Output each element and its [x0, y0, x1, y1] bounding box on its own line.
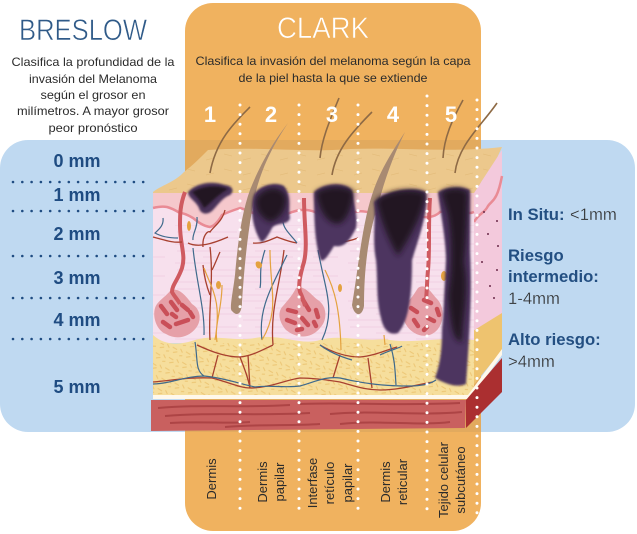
Breslow blue band [0, 140, 635, 432]
dermis front [153, 193, 474, 343]
sweat glands [154, 286, 443, 337]
risk legend [508, 205, 617, 371]
right side of skin [468, 150, 502, 335]
blood vessels blue [153, 217, 436, 387]
Breslow depth labels: 2 mm [53, 224, 101, 244]
risk legend: intermedio: [508, 267, 599, 286]
Breslow depth labels: 5 mm [53, 377, 101, 397]
Clark panel [185, 3, 481, 531]
Clark description: de la piel hasta la que se extiende [238, 71, 428, 85]
fine hairs [210, 98, 497, 175]
epidermis basal line [153, 207, 474, 227]
Clark level numbers: 4 [387, 102, 400, 127]
Breslow depth labels: 4 mm [53, 310, 101, 330]
risk legend: Riesgo [508, 246, 564, 265]
risk legend: >4mm [508, 352, 555, 371]
fat texture [153, 343, 474, 395]
muscle right side [466, 358, 502, 428]
hair shaft Dermis reticular [352, 132, 405, 314]
melanoma 1 [188, 183, 233, 214]
Clark layer labels: papilar [272, 462, 287, 502]
white membrane [153, 349, 502, 399]
Breslow depth separators [13, 182, 150, 339]
Breslow depth labels: 3 mm [53, 268, 101, 288]
Clark layer labels: Interfase [305, 458, 320, 508]
Breslow description: peor pronóstico [48, 121, 138, 135]
Breslow description: milímetros. A mayor grosor [17, 104, 169, 118]
top surface of skin [153, 147, 502, 196]
Breslow depth labels [53, 151, 101, 397]
melanoma 2 [252, 184, 290, 242]
muscle fibres [158, 403, 462, 427]
melanoma 3 [314, 184, 357, 260]
Clark level numbers: 2 [265, 102, 277, 127]
Clark level separators [240, 96, 477, 514]
nerves yellow [204, 250, 385, 350]
Clark layer labels: subcutáneo [453, 446, 468, 514]
gland ducts [172, 192, 430, 306]
Clark layer labels: Dermis [255, 461, 270, 503]
right side epidermis line [474, 176, 502, 222]
dermis hatching [153, 225, 474, 340]
right side fat [468, 313, 502, 392]
risk legend: In Situ: [508, 205, 565, 224]
hair shaft Dermis papilar [231, 123, 288, 314]
nerve endings [187, 221, 447, 292]
risk legend: 1-4mm [508, 289, 560, 308]
Clark title: CLARK [277, 12, 369, 45]
melanoma 4 [374, 189, 426, 334]
Clark layer labels: retículo [322, 462, 337, 504]
Clark description [196, 54, 471, 85]
epidermis pink band [153, 193, 474, 227]
Clark level numbers [204, 102, 457, 127]
risk legend: Alto riesgo: [508, 330, 601, 349]
skin cross-section illustration [151, 98, 502, 431]
Clark layer labels: Tejido celular [436, 441, 451, 518]
blood vessels red [153, 210, 433, 390]
Clark layer labels [204, 441, 468, 518]
Breslow description: Clasifica la profundidad de la [12, 55, 175, 69]
Clark layer labels: Dermis [204, 458, 219, 500]
Clark level numbers: 1 [204, 102, 216, 127]
surface texture [153, 147, 502, 193]
Clark layer labels: reticular [395, 458, 410, 505]
melanoma 5 [435, 187, 471, 386]
Clark panel overlap [185, 140, 481, 432]
Breslow description [12, 55, 175, 135]
Breslow depth labels: 1 mm [53, 185, 101, 205]
fat layer [153, 335, 474, 396]
Breslow depth labels: 0 mm [53, 151, 101, 171]
risk legend: <1mm [570, 205, 617, 224]
Clark layer labels: Dermis [378, 461, 393, 503]
muscle front [151, 400, 466, 431]
Clark level numbers: 3 [326, 102, 338, 127]
Breslow description: según el grosor en [40, 88, 146, 102]
Clark layer labels: papilar [340, 463, 355, 503]
Clark description: Clasifica la invasión del melanoma según la capa [196, 54, 471, 68]
Clark level numbers: 5 [445, 102, 457, 127]
right side pores [481, 211, 499, 299]
Breslow title: BRESLOW [19, 14, 148, 47]
Breslow description: invasión del Melanoma [29, 72, 157, 86]
